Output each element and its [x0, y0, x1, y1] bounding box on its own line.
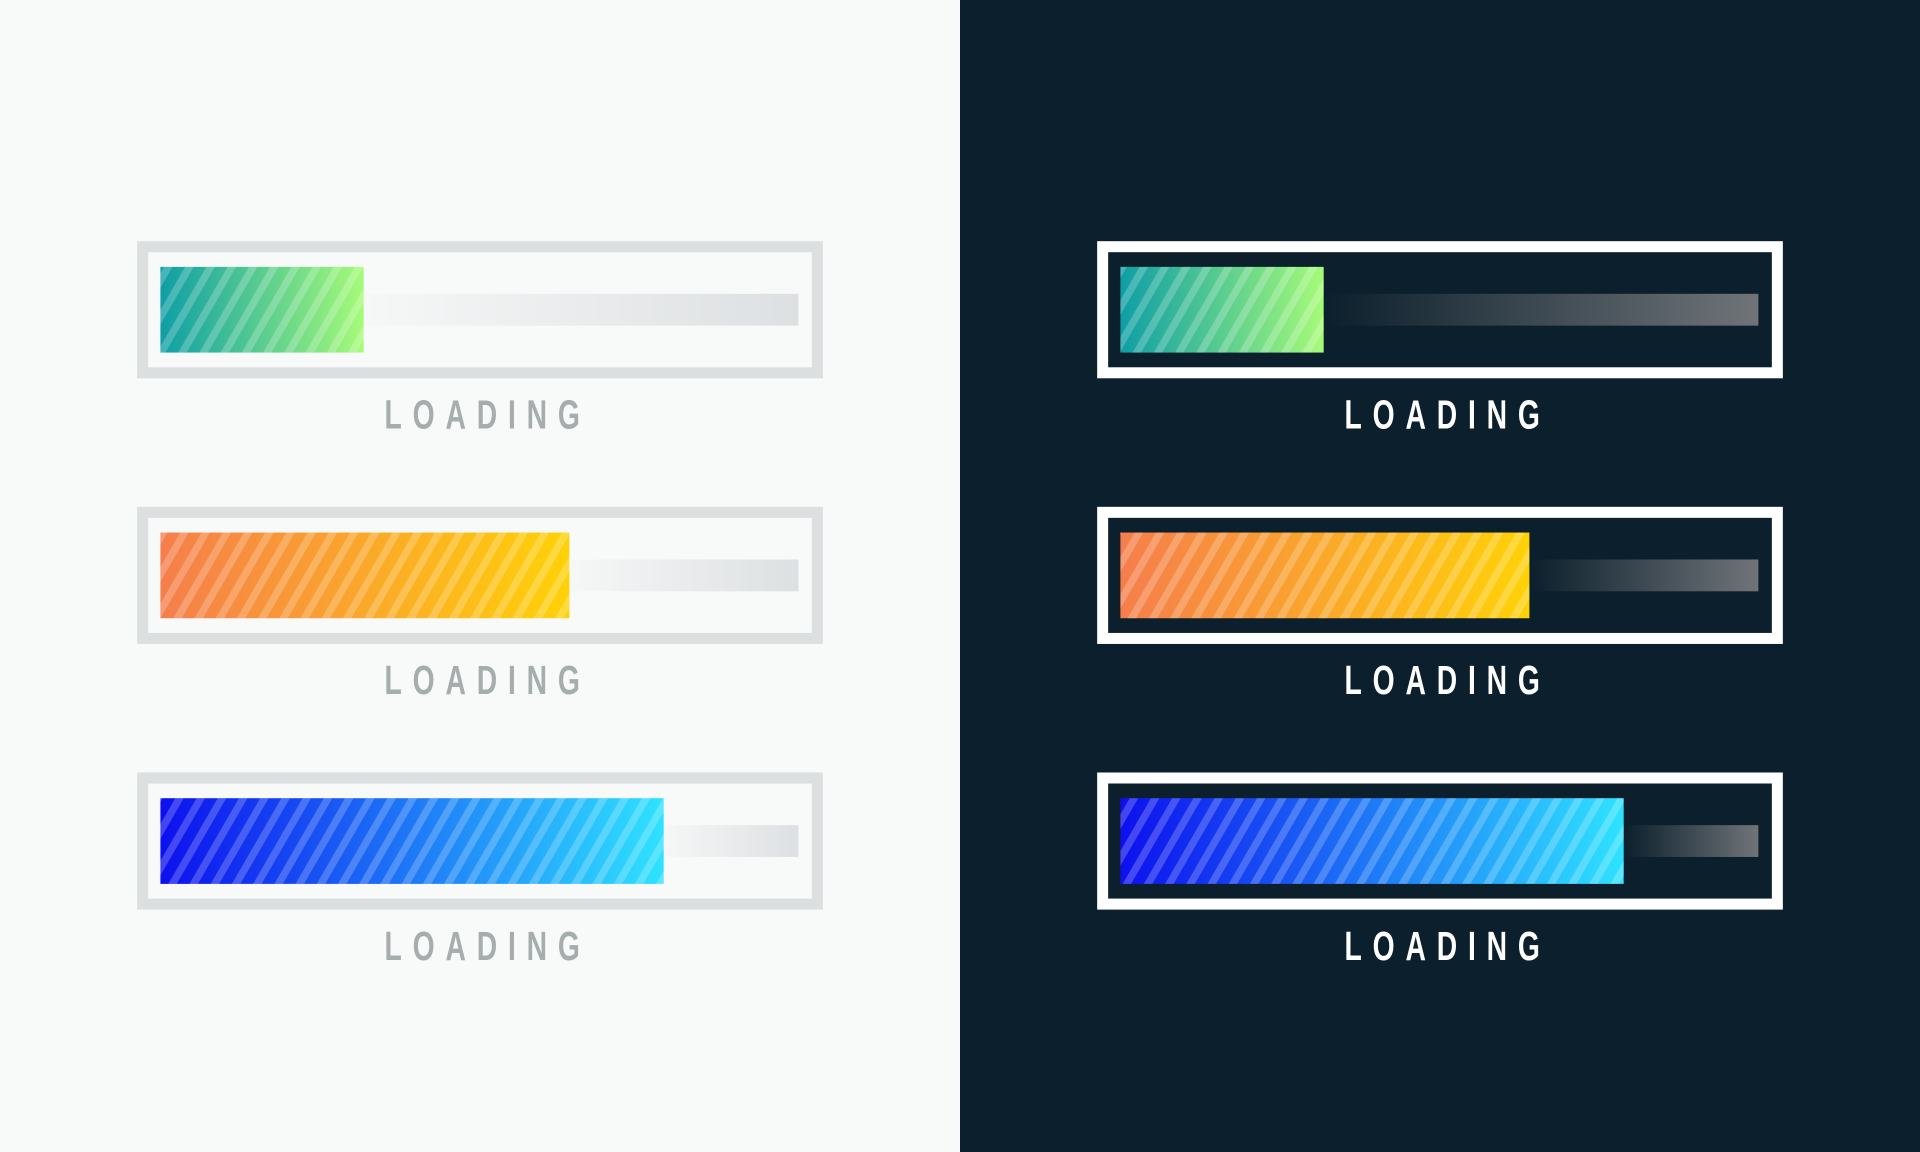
light loading bar 3: [143, 778, 817, 904]
panel: dark background: [960, 0, 1920, 1152]
dark loading bar 1: [1103, 247, 1777, 373]
light label 1: LOADING: [385, 393, 580, 438]
light loading bar 2: [143, 512, 817, 638]
panel: light background: [0, 0, 960, 1152]
dark label 2: LOADING: [1345, 658, 1540, 703]
light loading bar 1: [143, 247, 817, 373]
dark loading bar 2: [1103, 512, 1777, 638]
light label 2: LOADING: [385, 658, 580, 703]
light label 3: LOADING: [385, 924, 580, 969]
dark label 3: LOADING: [1345, 924, 1540, 969]
dark loading bar 3: [1103, 778, 1777, 904]
dark label 1: LOADING: [1345, 393, 1540, 438]
